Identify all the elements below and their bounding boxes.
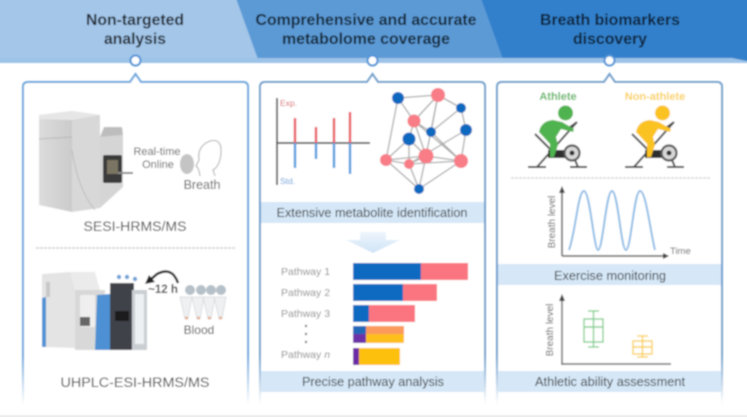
icon: curved arrow xyxy=(145,271,178,284)
pathway 2: Pathway 2 xyxy=(281,287,330,299)
chart: metabolite network xyxy=(380,88,472,194)
caption bar: athletic ability xyxy=(498,371,721,392)
caption bar: athletic ability: Athletic ability assessment xyxy=(535,374,685,389)
pathway 1 xyxy=(281,263,468,280)
icon: athlete cyclist xyxy=(528,106,587,167)
label: breath: Breath xyxy=(184,178,220,192)
caption bar: pathway analysis: Precise pathway analysis xyxy=(302,374,444,389)
label: non-athlete: Non-athlete xyxy=(625,91,685,103)
label: blood: Blood xyxy=(184,323,214,337)
chart: athletic ability box plot xyxy=(545,294,671,365)
heading: comprehensive: Comprehensive and accurate xyxy=(256,12,477,29)
heading: breath biomarkers: Breath biomarkers xyxy=(540,12,680,29)
label: UHPLC-ESI-HRMS/MS: UHPLC-ESI-HRMS/MS xyxy=(60,375,210,390)
label: Std.: Std. xyxy=(280,176,295,186)
pathway n: Pathway n xyxy=(281,349,330,361)
chart: mirror spectrum xyxy=(277,98,370,186)
chart: exercise monitoring line xyxy=(547,186,691,259)
icon: UHPLC instrument xyxy=(42,272,147,350)
pathway 1: Pathway 1 xyxy=(281,266,330,278)
label: time: Time xyxy=(670,246,691,257)
label: breath level y axis: Breath level xyxy=(547,196,558,248)
bottom edge line xyxy=(0,415,747,417)
icon: sample arrow xyxy=(118,172,133,174)
chart: pathway bars xyxy=(281,263,468,365)
pathway 3 xyxy=(281,305,415,322)
divider: right xyxy=(511,177,710,179)
pathway 2 xyxy=(281,284,437,301)
divider: left xyxy=(36,247,235,249)
arrow: down to pathways xyxy=(346,232,400,253)
caption bar: metabolite identification: Extensive metabolite identification xyxy=(276,205,468,220)
panel: non-targeted analysis xyxy=(23,74,248,405)
heading: analysis line: analysis xyxy=(104,31,166,48)
timeline node 2 xyxy=(368,56,378,66)
caption bar: exercise monitoring: Exercise monitoring xyxy=(554,268,666,283)
label: SESI-HRMS/MS: SESI-HRMS/MS xyxy=(84,218,186,234)
panel: biomarkers discovery xyxy=(497,74,722,405)
heading: discovery: discovery xyxy=(573,31,647,48)
icon: non-athlete cyclist xyxy=(625,106,684,167)
pathway n xyxy=(281,348,400,365)
panel: metabolome coverage xyxy=(260,74,485,405)
timeline node 1 xyxy=(130,56,140,66)
icon: blood tubes xyxy=(180,285,226,320)
icon: breath cloud xyxy=(180,154,194,174)
label: online: Online xyxy=(142,159,174,171)
label: real-time: Real-time xyxy=(133,146,181,158)
header band xyxy=(0,0,747,63)
header segment: biomarkers xyxy=(478,0,747,62)
heading: non-targeted analysis: Non-targeted xyxy=(86,12,184,29)
label: athlete: Athlete xyxy=(539,91,577,103)
heading: metabolome coverage: metabolome coverage xyxy=(282,31,450,48)
timeline node 3 xyxy=(604,56,614,66)
pathway 3: Pathway 3 xyxy=(281,308,330,320)
header arrow strip xyxy=(0,58,747,63)
label: breath level axis: Breath level xyxy=(545,304,556,356)
header segment: metabolome coverage xyxy=(233,0,506,62)
ellipsis dots xyxy=(305,325,307,343)
label: 12 h: ~12 h xyxy=(148,284,178,296)
box: athlete xyxy=(584,311,603,347)
header segment: non-targeted xyxy=(0,0,260,62)
caption bar: pathway analysis xyxy=(261,371,484,392)
box: non-athlete xyxy=(633,336,652,357)
caption bar: exercise monitoring xyxy=(498,264,721,285)
pathway mixed xyxy=(353,326,404,343)
caption bar: metabolite identification xyxy=(261,202,484,223)
icon: head profile xyxy=(196,140,221,176)
icon: SESI mass spectrometer xyxy=(39,111,123,212)
label: Exp.: Exp. xyxy=(280,98,297,108)
